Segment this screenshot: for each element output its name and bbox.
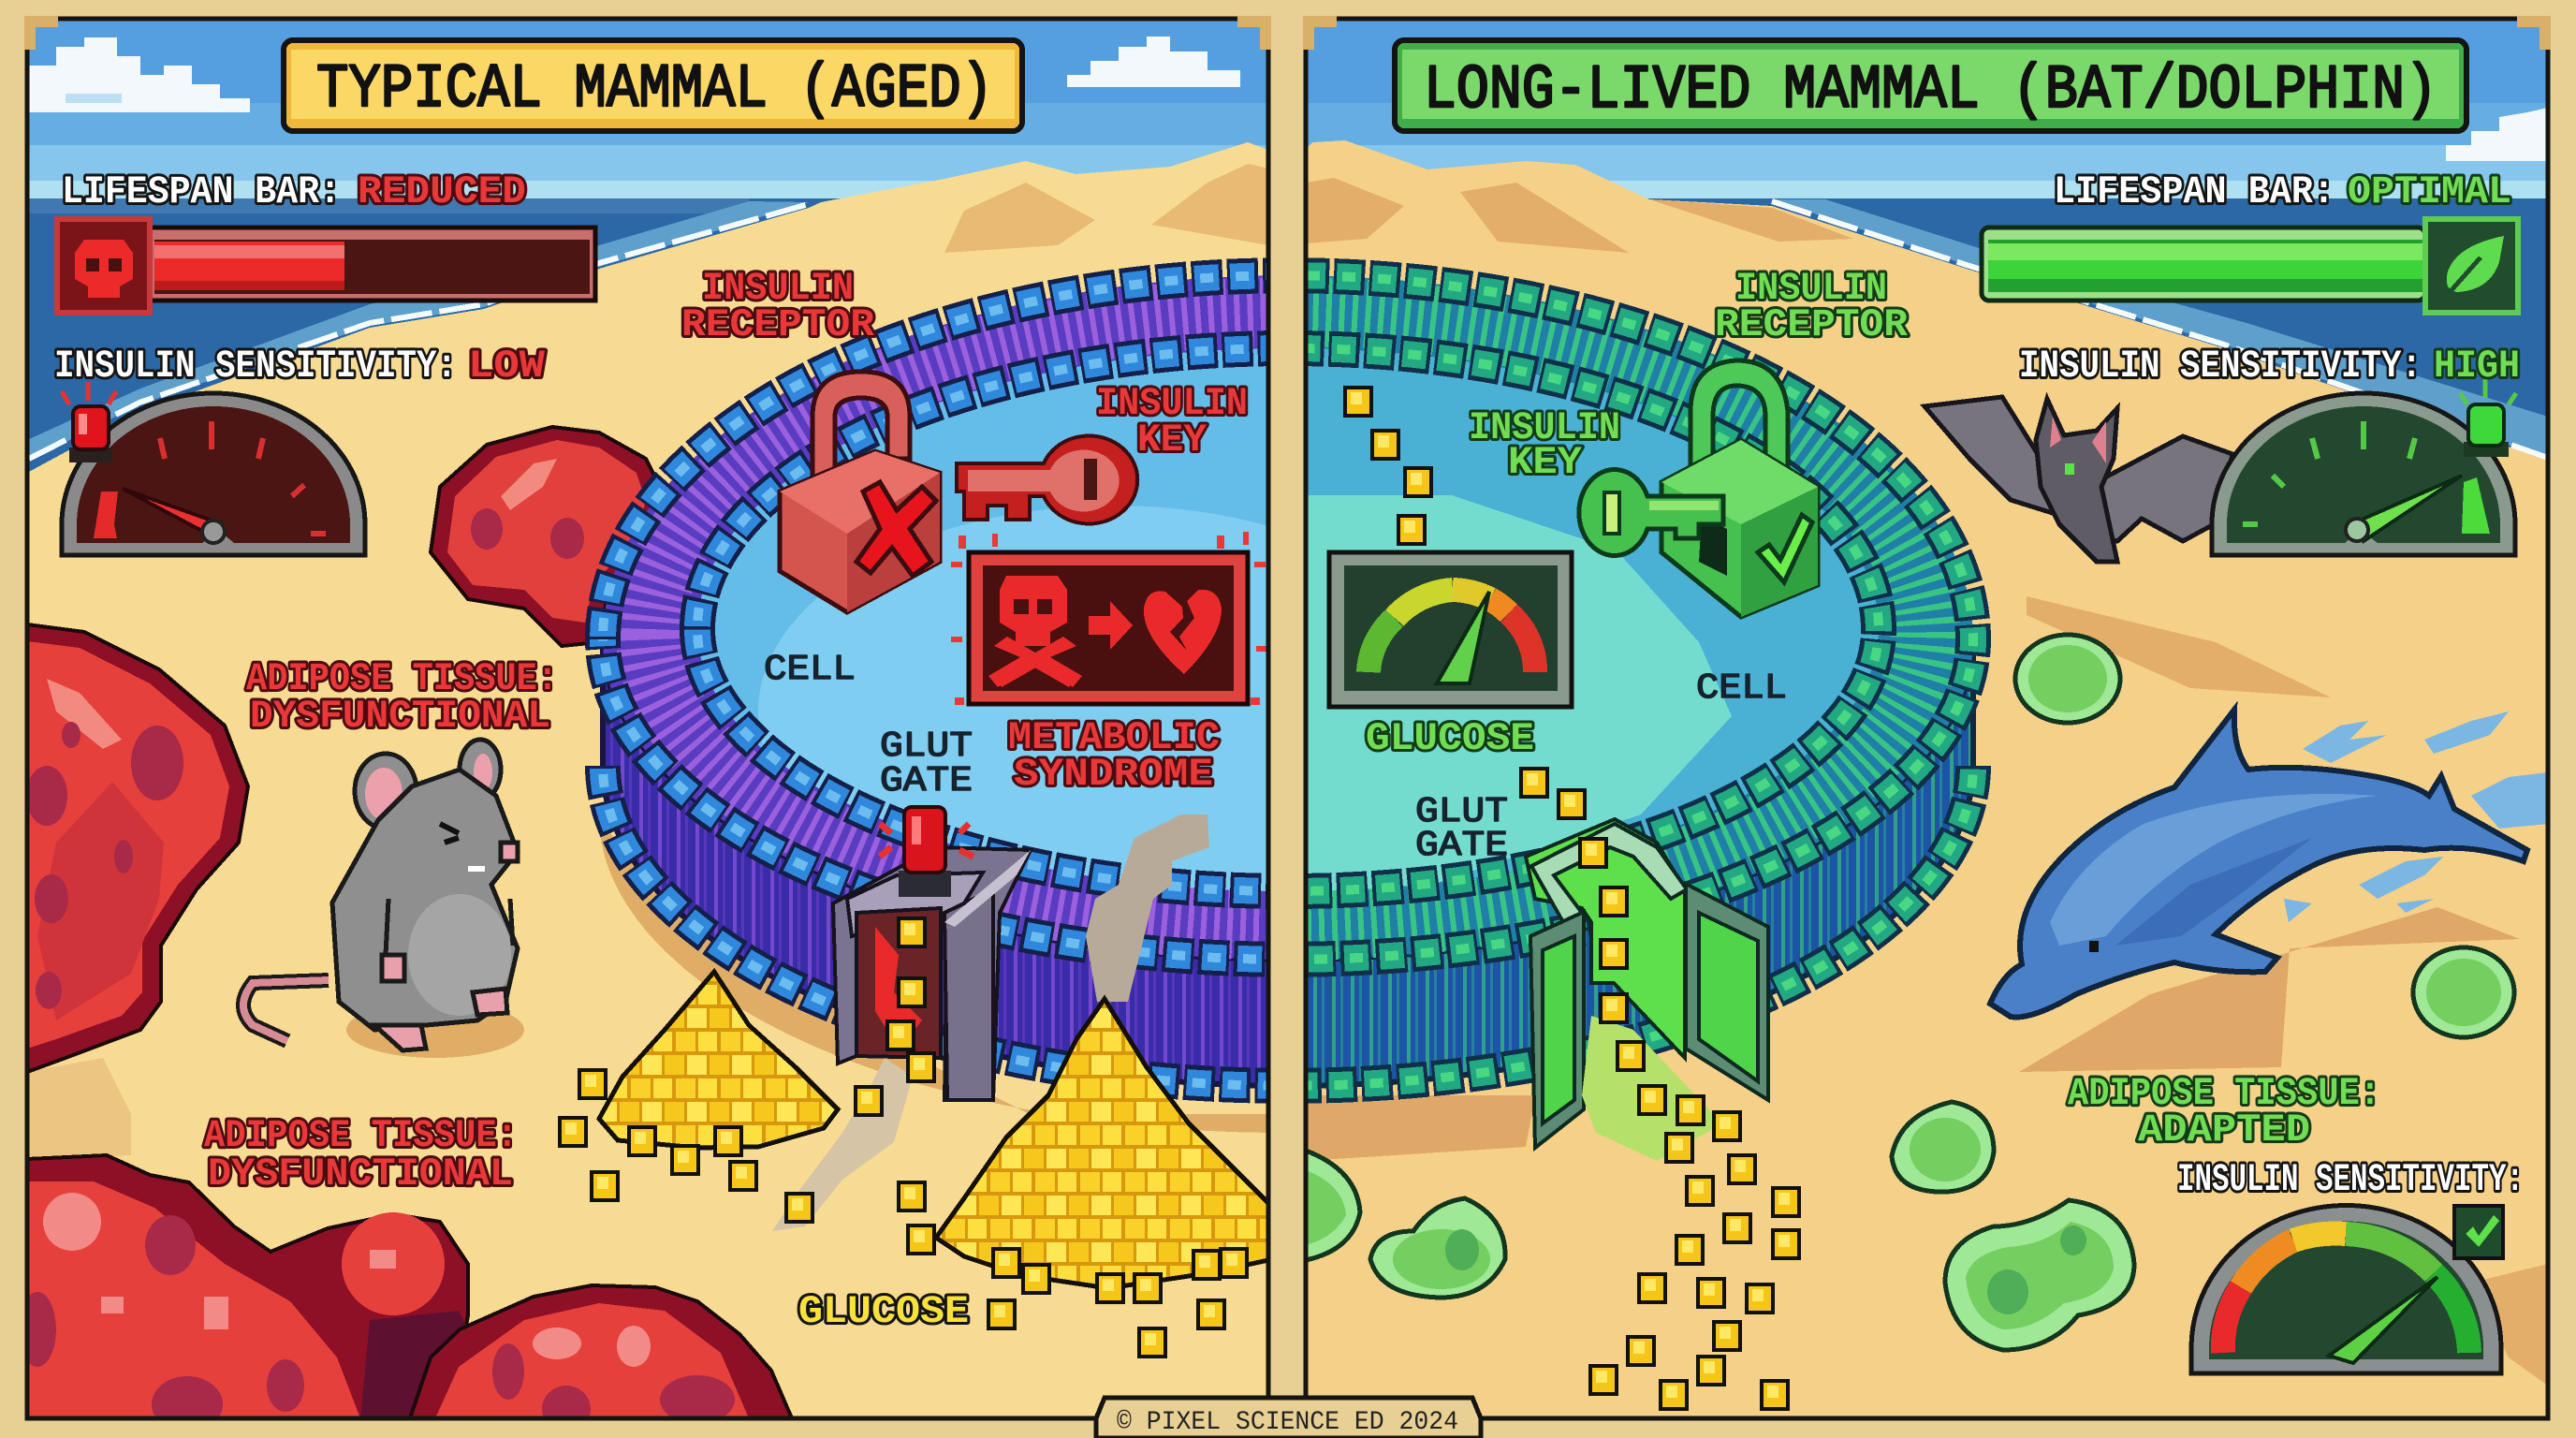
icon: red padlock <box>780 372 940 612</box>
label: cell: CELL <box>764 650 856 690</box>
warning sparks <box>951 532 1267 705</box>
glucose cubes: right <box>1343 386 1801 1411</box>
title text: TYPICAL MAMMAL (AGED) <box>316 54 993 125</box>
icon: green padlock <box>1661 360 1818 617</box>
label: cell: CELL <box>1696 668 1787 709</box>
icon: skull badge <box>57 219 150 313</box>
membrane shadow on sand <box>1306 1095 1535 1161</box>
label: lifespan bar reduced: LIFESPAN BAR: <box>62 169 341 214</box>
needle <box>1437 592 1489 683</box>
cell interior: left <box>700 348 1266 891</box>
glucose pile large <box>936 999 1273 1288</box>
lipid band: left <box>603 275 1266 959</box>
icon: cloud <box>2446 108 2548 161</box>
icon: dolphin <box>1990 710 2527 1017</box>
label: insulin receptor <box>681 266 875 347</box>
sea <box>30 198 840 472</box>
label: insulin key: KEY <box>1508 440 1583 485</box>
GLUT gate: open <box>1526 819 1768 1148</box>
label: insulin key <box>1096 381 1248 462</box>
mouse shadow <box>346 1015 524 1058</box>
adipose cell 1 <box>2015 635 2120 723</box>
inner lipid heads: right <box>697 348 1879 891</box>
bottom lipid heads: right <box>603 766 1973 1086</box>
lifespan bar: reduced <box>57 219 595 313</box>
adipose cell 2 <box>1892 1102 1994 1192</box>
sky <box>1306 19 2548 201</box>
gauge arcs <box>1368 590 1535 672</box>
cell interior highlight <box>758 506 1266 891</box>
label: lifespan bar optimal: LIFESPAN BAR: <box>2054 169 2334 214</box>
inner lipid heads: left <box>680 330 1266 909</box>
cell interior: right <box>697 348 1879 891</box>
label: insulin sensitivity low: LOW <box>468 344 546 389</box>
cell membrane wall: right <box>603 639 1973 1086</box>
lifespan bar: optimal <box>1982 219 2518 313</box>
smoke plume lower <box>772 1058 913 1231</box>
sea <box>1638 198 2548 479</box>
label: adipose tissue dysfunctional upper: ADIPOSE TISSUE: <box>246 656 558 701</box>
adipose blob: upper <box>431 427 665 646</box>
label: metabolic syndrome <box>1008 715 1220 797</box>
lipid stripes: right <box>651 312 1925 926</box>
membrane shadow on sand <box>599 824 1273 1133</box>
outer lipid heads: right <box>603 275 1973 960</box>
label: insulin receptor: RECEPTOR <box>1715 302 1909 347</box>
label: insulin sensitivity low: INSULIN SENSITIVITY: <box>54 344 457 389</box>
label: glut gate: GLUT <box>1415 792 1508 832</box>
label: insulin receptor: RECEPTOR <box>681 302 875 347</box>
label: adipose tissue dysfunctional upper <box>246 656 558 739</box>
cell membrane wall: left <box>600 650 1266 1088</box>
icon: arrow <box>1089 601 1133 650</box>
label: metabolic syndrome: SYNDROME <box>1014 752 1213 797</box>
label: adipose tissue adapted: ADAPTED <box>2138 1108 2310 1152</box>
label: lifespan bar optimal <box>2054 169 2511 214</box>
label: adipose tissue adapted: ADIPOSE TISSUE: <box>2068 1071 2380 1116</box>
label: insulin key: INSULIN <box>1469 405 1620 450</box>
water splashes <box>2284 712 2548 922</box>
copyright plate <box>1096 1398 1481 1438</box>
adipose blob: bottom centre <box>410 1285 792 1432</box>
heading: typical mammal banner <box>284 40 1022 131</box>
green glow trail <box>1582 1016 1722 1161</box>
cell interior teal area <box>1306 495 1732 927</box>
panel: typical mammal (aged) <box>30 21 1266 1416</box>
copyright text: © PIXEL SCIENCE ED 2024 <box>1117 1408 1458 1437</box>
icon: skull and crossbones <box>988 576 1082 687</box>
glucose gauge box <box>1329 552 1572 707</box>
adipose cell 4 <box>1306 1151 1360 1260</box>
label: insulin receptor <box>1715 266 1909 347</box>
label: insulin receptor: INSULIN <box>1735 266 1887 311</box>
icon: green light <box>2460 379 2516 457</box>
smoke plume upper <box>1086 814 1209 1002</box>
adipose cell 3 <box>1370 1198 1505 1298</box>
label: glut gate <box>1415 792 1508 866</box>
icon: broken heart <box>1144 590 1222 674</box>
label: lifespan bar optimal: OPTIMAL <box>2348 169 2511 214</box>
label: glut gate: GATE <box>1415 826 1508 866</box>
label: glut gate: GLUT <box>880 726 973 767</box>
heading: long-lived mammal banner <box>1395 40 2466 131</box>
lipid band: right <box>603 275 1973 960</box>
gauge: insulin sensitivity low <box>62 382 365 555</box>
icon: check badge <box>2454 1206 2503 1258</box>
sand and dunes <box>1306 140 2548 1418</box>
gauge: insulin sensitivity high <box>2212 379 2516 555</box>
label: insulin key: KEY <box>1137 418 1208 462</box>
label: insulin sensitivity high: INSULIN SENSITIVITY: <box>2019 344 2422 389</box>
icon: leaf badge <box>2425 219 2518 313</box>
icon: clouds <box>24 37 1240 112</box>
label: glut gate: GATE <box>880 761 973 801</box>
label: metabolic syndrome: METABOLIC <box>1008 715 1220 760</box>
gauge: lower insulin sensitivity <box>2191 1206 2503 1373</box>
label: adipose tissue adapted <box>2068 1071 2380 1152</box>
label: glut gate <box>880 726 973 801</box>
label: insulin receptor: INSULIN <box>702 266 854 311</box>
icon: red insulin key <box>957 436 1137 524</box>
metabolic syndrome warning box <box>951 532 1267 705</box>
icon: bat <box>1925 397 2232 562</box>
icon: red alarm light <box>62 382 116 462</box>
adipose cell 5 <box>1945 1200 2134 1350</box>
title text: LONG-LIVED MAMMAL (BAT/DOLPHIN) <box>1424 55 2437 125</box>
label: adipose tissue dysfunctional lower <box>204 1113 518 1196</box>
label: lifespan bar reduced: REDUCED <box>358 169 526 214</box>
icon: green insulin key <box>1579 469 1723 556</box>
panel corner notches <box>24 16 2551 50</box>
icon: aged obese mouse <box>243 740 518 1050</box>
lipid stripes: left <box>617 277 1266 959</box>
panel: long-lived mammal (bat/dolphin) <box>603 19 2548 1418</box>
adipose blob: left <box>26 624 248 1072</box>
label: adipose tissue dysfunctional lower: ADIPOSE TISSUE: <box>204 1113 518 1158</box>
adipose cell 6 <box>2413 947 2514 1037</box>
label: insulin key <box>1469 405 1620 485</box>
label: glucose: GLUCOSE <box>798 1289 969 1334</box>
label: adipose tissue dysfunctional upper: DYSFUNCTIONAL <box>250 694 550 739</box>
adipose blob: bottom left cluster <box>19 1155 468 1432</box>
icon: red alarm light on gate <box>880 807 973 897</box>
glucose pile small <box>599 972 838 1148</box>
label: insulin sensitivity high: HIGH <box>2434 344 2520 389</box>
label: adipose tissue dysfunctional lower: DYSFUNCTIONAL <box>208 1152 513 1196</box>
glucose cubes: left <box>558 917 1249 1358</box>
green adipose blobs <box>1306 635 2514 1350</box>
sand and dunes <box>27 142 1268 1418</box>
GLUT gate: damaged <box>833 847 1031 1100</box>
label: lifespan bar reduced <box>62 169 526 214</box>
sky <box>27 19 1268 201</box>
label: insulin key: INSULIN <box>1096 381 1248 426</box>
bottom lipid heads: left <box>585 766 1266 1103</box>
label: glucose: GLUCOSE <box>1366 716 1534 761</box>
outer lipid heads: left <box>585 258 1266 977</box>
